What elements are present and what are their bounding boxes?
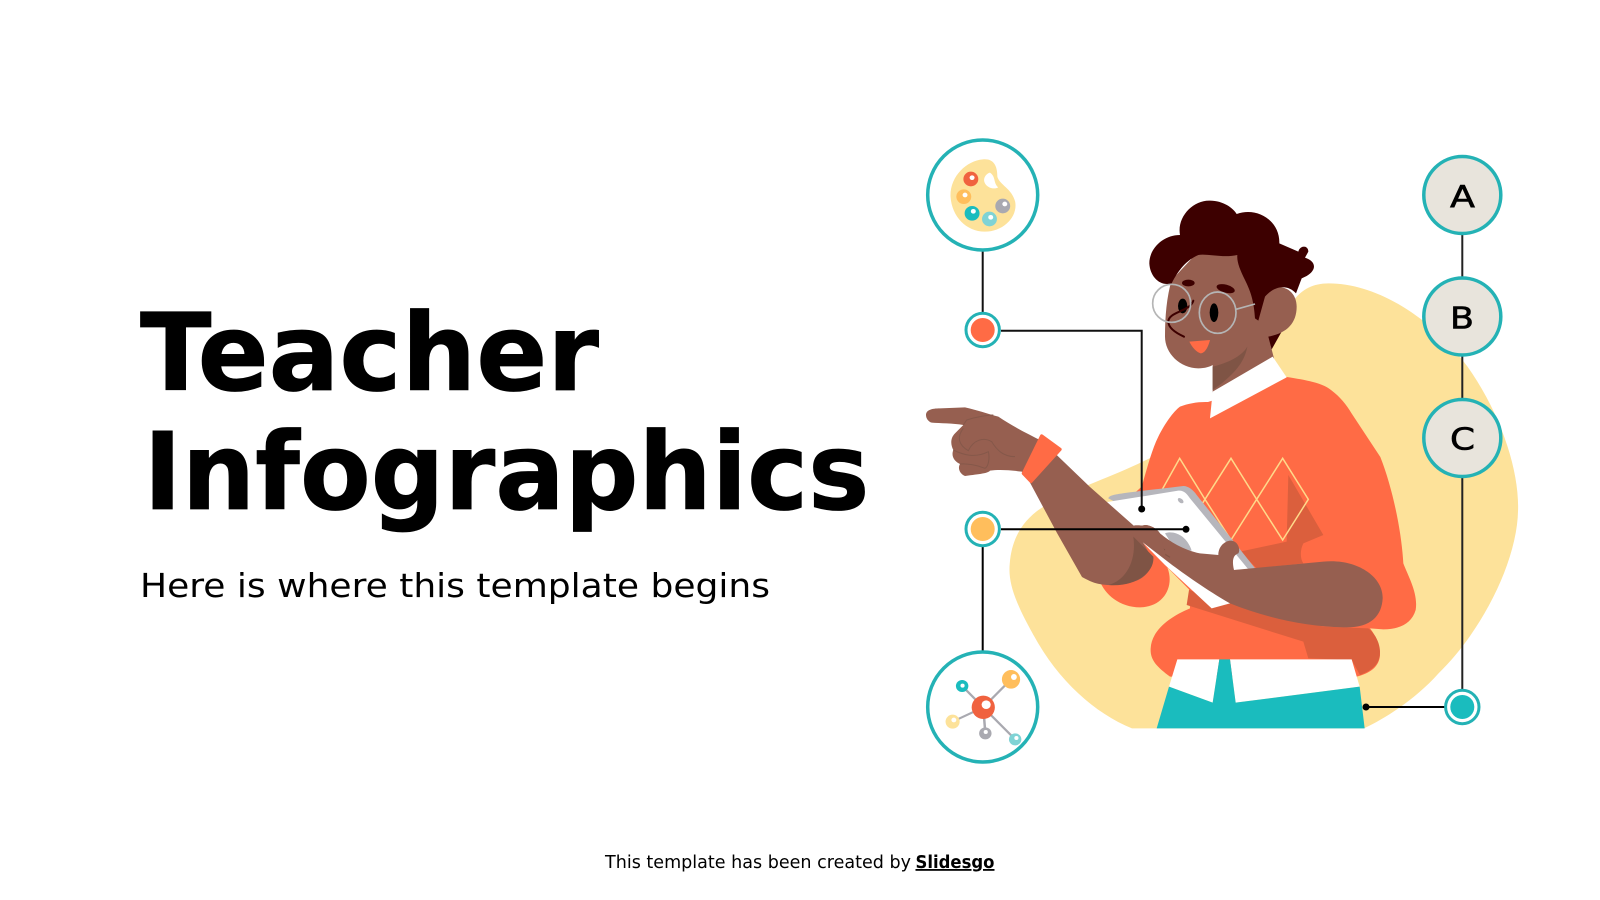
connector: A B C vertical line bbox=[1461, 195, 1463, 707]
hair bbox=[1149, 201, 1314, 321]
option circle B bbox=[1424, 278, 1501, 355]
option circle A: A bbox=[1450, 180, 1476, 215]
raised pointing arm bbox=[1027, 447, 1153, 585]
sweater bbox=[1099, 377, 1416, 677]
hand creases bbox=[953, 415, 1015, 468]
tablet bbox=[1103, 486, 1256, 608]
teacher figure bbox=[926, 201, 1416, 728]
option circle A bbox=[1424, 156, 1501, 234]
option circle C: C bbox=[1450, 422, 1475, 458]
finger creases bbox=[1133, 533, 1170, 557]
node: teal dot bbox=[1446, 690, 1479, 724]
mouth bbox=[1189, 340, 1210, 353]
footer credit: This template has been created by bbox=[604, 852, 911, 873]
eyebrows bbox=[1182, 280, 1236, 295]
face and neck bbox=[1165, 253, 1297, 393]
footer credit: Slidesgo bbox=[916, 852, 994, 873]
shirt tails bbox=[1169, 659, 1360, 703]
collar bbox=[1210, 357, 1287, 418]
pointing hand and wristband bbox=[926, 407, 1060, 481]
title: Infographics bbox=[144, 411, 870, 535]
connector: top dot to tablet bbox=[983, 251, 1145, 512]
nose bbox=[1168, 301, 1193, 337]
title: Teacher bbox=[140, 292, 599, 416]
option circle C bbox=[1424, 400, 1501, 476]
sweater and trousers bbox=[1099, 377, 1416, 728]
finger tips over arm bbox=[1128, 525, 1167, 560]
wristband bbox=[1023, 436, 1060, 481]
connector: bottom dot to trousers bbox=[1362, 704, 1445, 710]
glasses bbox=[1153, 284, 1255, 333]
option circle B: B bbox=[1450, 302, 1474, 336]
head bbox=[1149, 201, 1314, 418]
hair under ear bbox=[1266, 332, 1282, 349]
icon: paint palette bbox=[928, 140, 1038, 250]
neck shadow bbox=[1213, 347, 1247, 390]
trousers bbox=[1157, 659, 1365, 728]
icon: molecule network bbox=[928, 652, 1038, 762]
node: red dot bbox=[966, 313, 999, 347]
eyes bbox=[1178, 299, 1218, 322]
argyle pattern bbox=[1157, 458, 1308, 540]
connector: middle dot to tablet and molecule bbox=[983, 526, 1190, 652]
arm shadow bbox=[1108, 537, 1153, 585]
hand bbox=[926, 407, 1043, 476]
subtitle: Here is where this template begins bbox=[140, 566, 770, 605]
title bbox=[140, 292, 870, 535]
sweater shading bbox=[1187, 475, 1380, 675]
forearm holding tablet bbox=[1128, 525, 1383, 627]
teacher illustration background blob bbox=[1009, 283, 1518, 728]
node: orange dot bbox=[966, 512, 999, 546]
